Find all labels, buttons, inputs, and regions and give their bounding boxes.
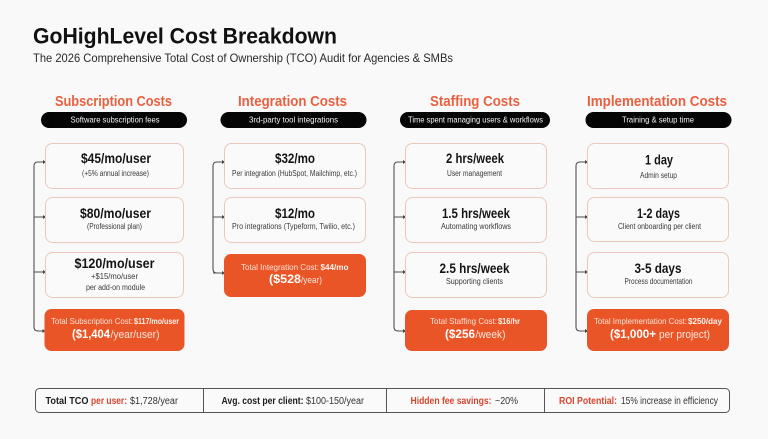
card: 2 hrs/week: 2 hrs/week [446,151,504,166]
stat: ROI potential [559,396,718,407]
card: $120/mo/user [46,252,184,298]
pill: 3rd-party tool integrations [220,112,366,128]
panel: staffing costs [394,94,550,351]
total: subscription cost: /year/user) [110,329,160,341]
stat: ROI potential: 15% increase in efficiency [621,396,718,407]
total: implementation cost: per project) [659,329,710,341]
card: 1 day [588,144,728,188]
stat: total TCO per user: per user: [91,396,127,407]
total: subscription cost: Total Subscription Cost: [51,317,133,326]
panel: implementation costs [576,94,732,351]
card: $45/mo/user [46,144,184,188]
total: subscription cost [44,309,184,351]
stat: total TCO per user: $1,728/year [130,396,179,407]
total: integration cost: $44/mo [320,263,348,272]
card: $12/mo: Pro integrations (Typeform, Twilio, etc.) [232,222,355,231]
card: 1-2 days: 1-2 days [637,206,680,221]
card: 1-2 days [588,198,728,242]
total: staffing cost: /week) [476,329,506,341]
card: 2.5 hrs/week: Supporting clients [446,277,503,286]
total: integration cost: /year) [301,275,322,286]
total: subscription cost: $117/mo/user [134,317,180,326]
heading: integration costs: Integration Costs [238,94,347,110]
card: 1.5 hrs/week: Automating workflows [441,222,511,231]
pill: software subscription fees: Software subscription fees [70,116,160,124]
panel: integration costs [213,94,366,297]
card: $120/mo/user: +$15/mo/user [91,272,138,281]
stat: average cost per client [222,396,365,407]
subtitle: The 2026 Comprehensive Total Cost of Ownership (TCO) Audit for Agencies & SMBs [33,51,453,65]
card: 2.5 hrs/week: 2.5 hrs/week [440,261,510,276]
card: 1.5 hrs/week: 1.5 hrs/week [442,206,510,221]
total: implementation cost: $250/day [688,317,722,326]
card: 3-5 days: Process documentation [624,277,692,286]
total: integration cost [224,254,366,297]
total: implementation cost [587,309,729,351]
summary bar [36,388,730,412]
card: $32/mo [224,144,366,188]
card: $32/mo: $32/mo [275,151,315,166]
stat: total TCO per user [46,396,179,407]
card: 1 day: Admin setup [640,171,678,180]
card: $32/mo: Per integration (HubSpot, Mailchimp, etc.) [232,169,357,178]
card: $45/mo/user: (+5% annual increase) [82,169,149,178]
card: 1 day: 1 day [645,152,673,168]
card: $12/mo: $12/mo [275,206,315,221]
card: $80/mo/user [46,198,184,242]
card: $120/mo/user: $120/mo/user [74,256,155,271]
pill: time spent [400,112,550,128]
total: staffing cost: Total Staffing Cost: [430,317,497,326]
total: implementation cost: ($1,000+ [610,327,656,341]
card: 2.5 hrs/week [406,252,546,298]
pill: time spent: Time spent managing users & workflows [408,116,543,124]
card: 2 hrs/week [406,144,546,188]
total: staffing cost: $16/hr [498,317,521,326]
card: 1-2 days: Client onboarding per client [618,222,702,231]
card: 2 hrs/week: User management [447,169,503,178]
card: $80/mo/user: (Professional plan) [87,222,142,231]
stat: hidden fee savings: ~20% [495,396,518,407]
connector arrows [576,160,588,333]
pill: training and setup time [586,112,732,128]
pill: training and setup time: Training & setup time [622,116,695,124]
stat: ROI potential: ROI Potential: [559,396,617,407]
stat: hidden fee savings: Hidden fee savings: [410,396,492,407]
connector arrows [34,160,46,333]
title: GoHighLevel Cost Breakdown [33,24,337,48]
card: $12/mo [224,198,366,242]
card: $120/mo/user: per add-on module [86,283,145,292]
stat: average cost per client: $100-150/year [306,396,365,407]
card: $45/mo/user: $45/mo/user [81,151,152,166]
stat: average cost per client: Avg. cost per client: [222,396,304,407]
pill: software subscription fees [41,112,187,128]
heading: staffing costs: Staffing Costs [430,94,520,110]
card: 3-5 days: 3-5 days [634,261,682,276]
total: implementation cost: Total Implementation Cost: [594,317,687,326]
total: integration cost: Total Integration Cost: [241,263,319,272]
card: $80/mo/user: $80/mo/user [80,206,152,221]
card: 1.5 hrs/week [406,198,546,242]
heading: subscription costs: Subscription Costs [55,94,172,110]
pill: 3rd-party tool integrations: 3rd-party tool integrations [249,116,338,124]
total: staffing cost [405,310,547,351]
heading: implementation costs: Implementation Costs [587,94,727,110]
stat: total TCO per user: Total TCO [46,396,89,407]
connector arrows [394,160,406,333]
total: integration cost: ($528 [269,272,301,286]
panel: subscription costs [34,94,187,351]
total: staffing cost: ($256 [445,327,475,341]
connector arrows [213,160,225,275]
card: 3-5 days [588,252,728,298]
total: subscription cost: ($1,404 [72,327,110,341]
